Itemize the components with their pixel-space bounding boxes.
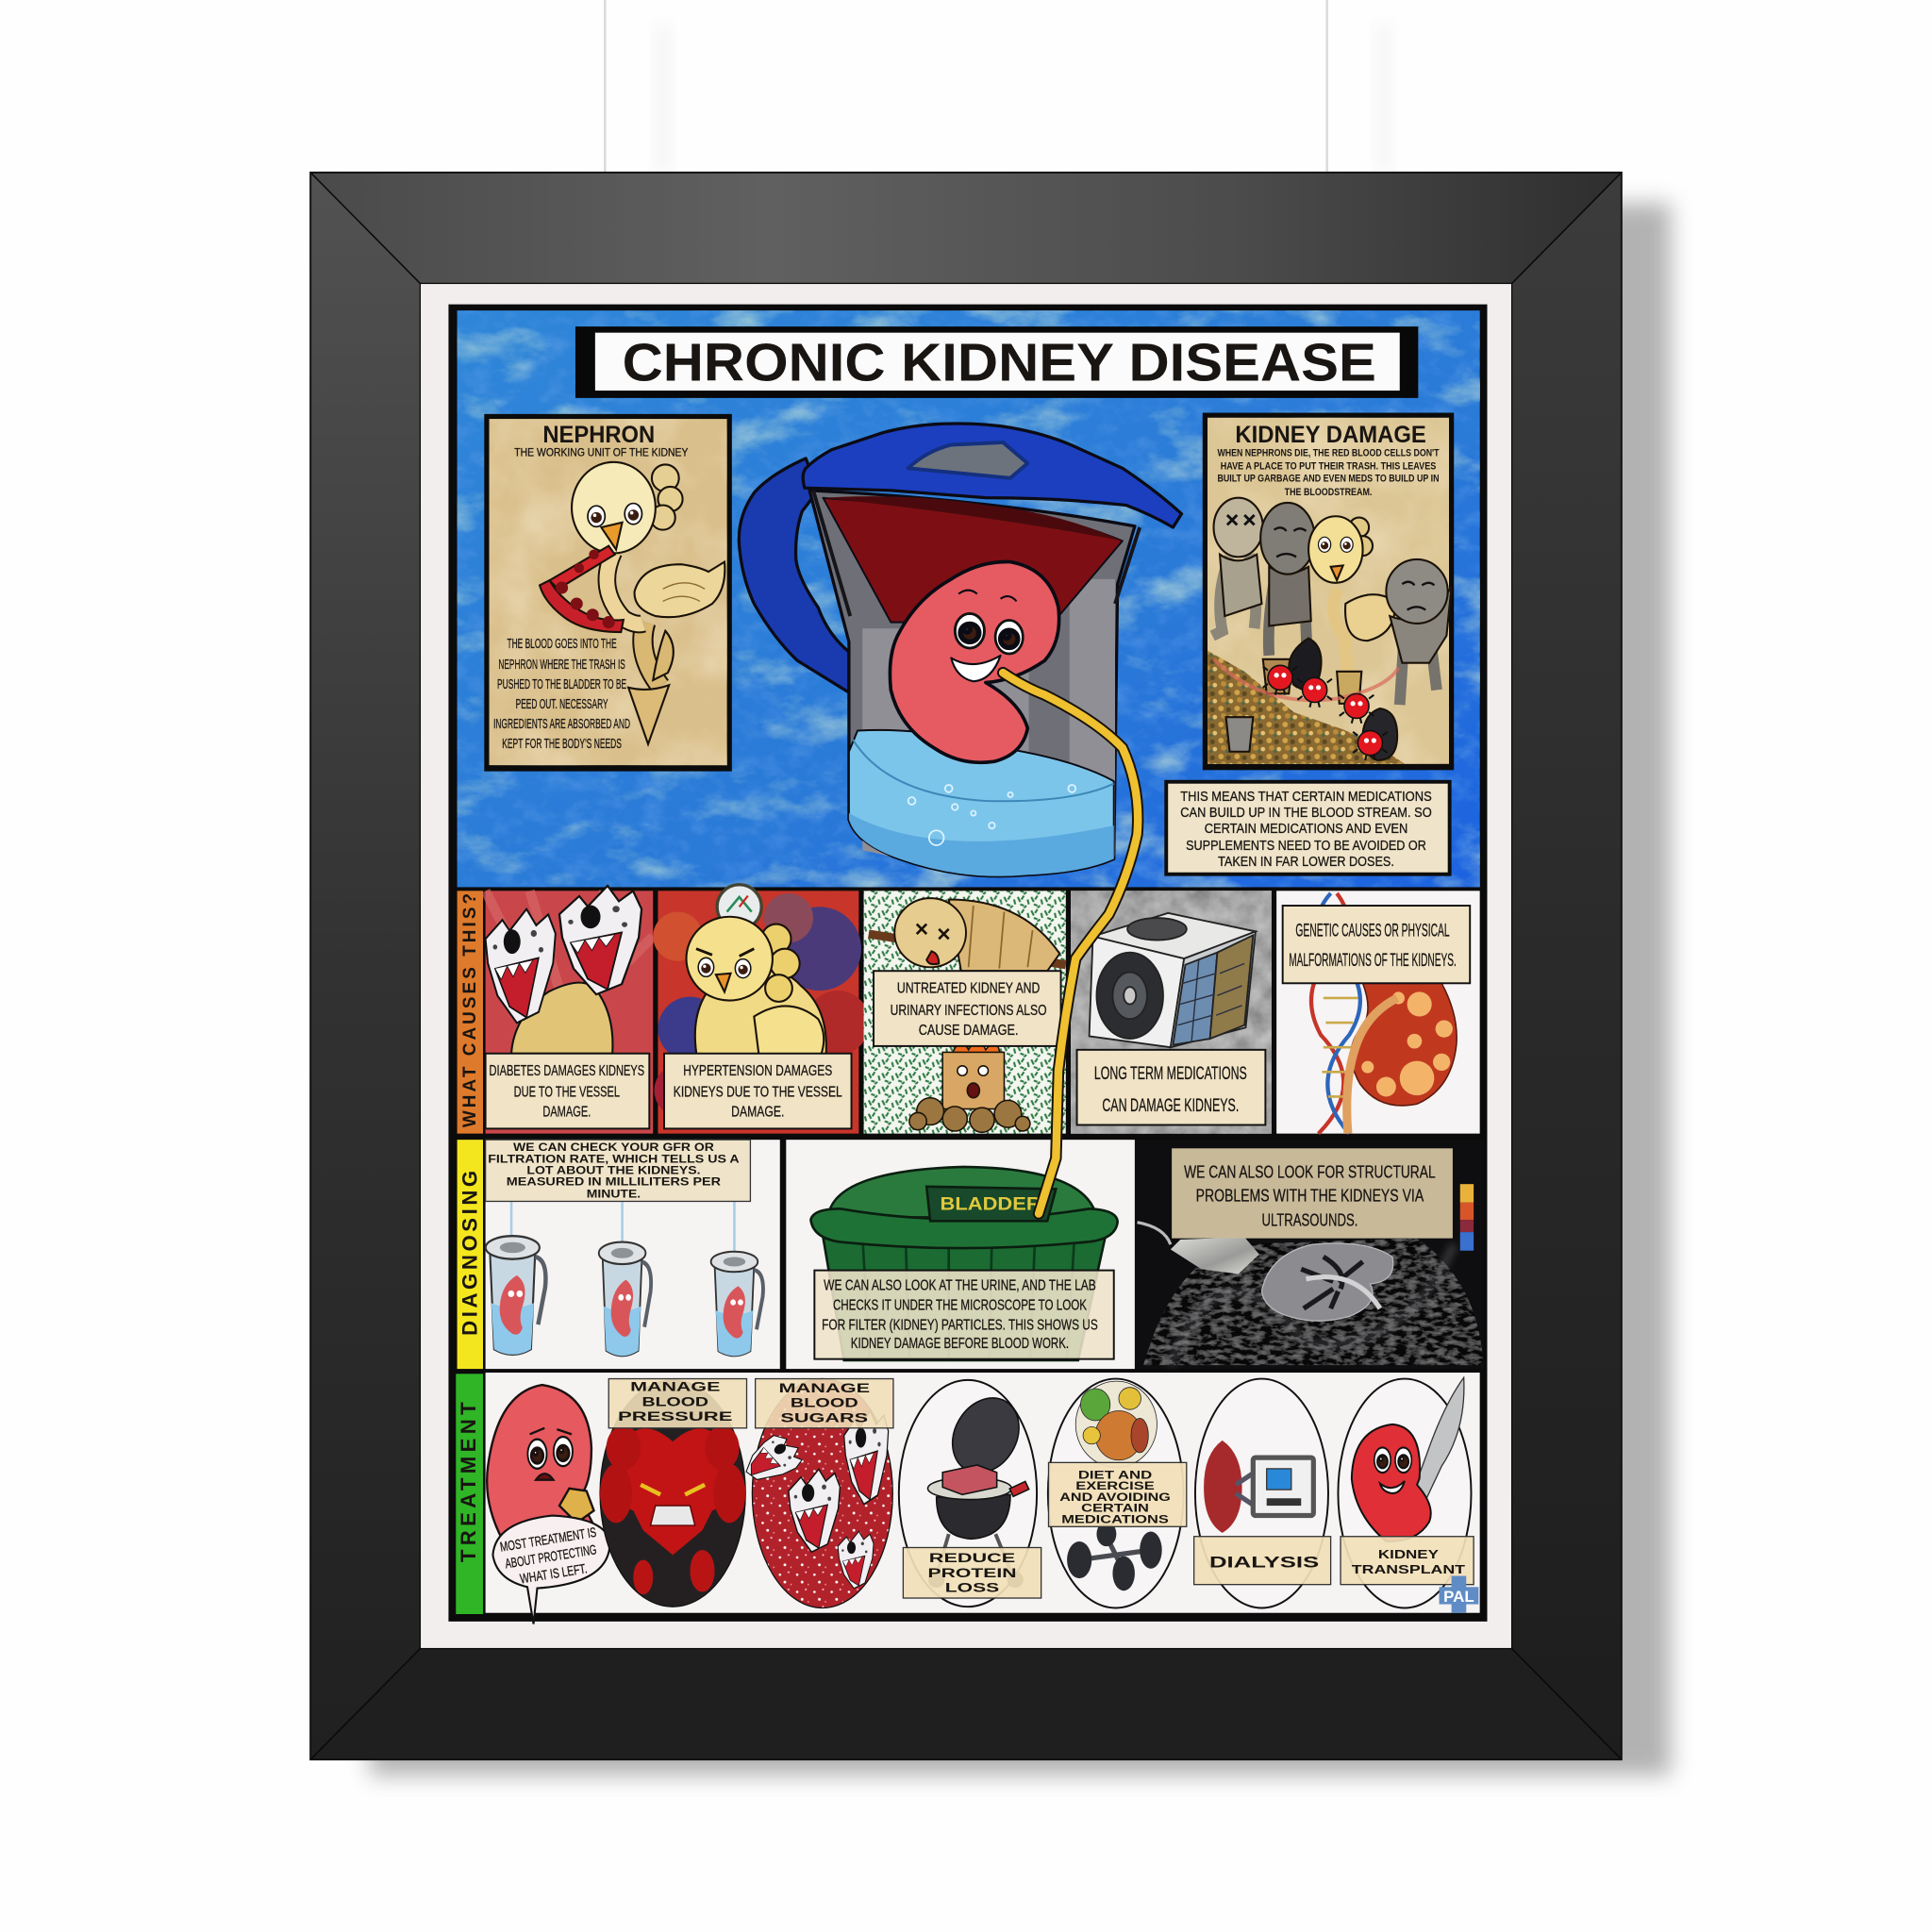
blood reservoir (823, 498, 1123, 623)
caption: gfr: MINUTE. (587, 1189, 641, 1201)
panel: blue header background (458, 310, 1480, 887)
nephron text block (493, 637, 630, 752)
label: diet and exercise: AND AVOIDING (1059, 1491, 1171, 1504)
caption: ultrasound: PROBLEMS WITH THE KIDNEYS VIA (1196, 1185, 1424, 1205)
speech bubble: ABOUT PROTECTING (504, 1542, 598, 1572)
caption: infections: CAUSE DAMAGE. (919, 1023, 1019, 1039)
panel: urine bladder bin (786, 1140, 1135, 1369)
callout: medications (1164, 780, 1452, 876)
caption: ultrasound: WE CAN ALSO LOOK FOR STRUCTURAL (1184, 1162, 1436, 1182)
caption: genetic causes: GENETIC CAUSES OR PHYSICAL (1295, 921, 1450, 941)
icon: ultrasound probe (1138, 1223, 1259, 1274)
speech bubble (492, 1516, 610, 1624)
label: diet and exercise: CERTAIN (1081, 1503, 1149, 1515)
icon: dna helix (1311, 893, 1360, 1134)
label: manage blood pressure: PRESSURE (618, 1409, 732, 1424)
label: diet and exercise (1049, 1462, 1187, 1526)
panel: genetic causes (1276, 891, 1480, 1134)
oval: kidney transplant (1338, 1377, 1472, 1607)
speech bubble: WHAT IS LEFT. (519, 1561, 589, 1587)
icon: nephron bird (540, 462, 724, 744)
label: manage blood sugars: BLOOD (791, 1396, 858, 1410)
icon: sad kidney (487, 1385, 594, 1541)
nephron text block: THE BLOOD GOES INTO THE (507, 637, 617, 652)
speech bubble: MOST TREATMENT IS (499, 1525, 597, 1556)
caption: gfr: MEASURED IN MILLILITERS PER (507, 1175, 722, 1188)
caption: hypertension: DAMAGE. (731, 1104, 784, 1120)
icon: yellow nephron attacked (511, 983, 612, 1054)
icon: smiling kidney (1352, 1424, 1431, 1541)
caption: urine: FOR FILTER (KIDNEY) PARTICLES. THIS SHOWS US (822, 1317, 1098, 1333)
caption: urine (814, 1271, 1114, 1359)
oval: muscular angry heart (600, 1380, 745, 1607)
icon: pressure gauge (717, 885, 761, 929)
damaged nephrons (1212, 498, 1452, 760)
nephron text block: NEPHRON WHERE THE TRASH IS (498, 658, 625, 673)
drip lines (511, 1201, 734, 1252)
label: manage blood pressure: MANAGE (630, 1380, 720, 1394)
title: CHRONIC KIDNEY DISEASE (623, 333, 1376, 392)
label: dialysis: DIALYSIS (1209, 1553, 1319, 1571)
kidney damage heading: KIDNEY DAMAGE (1235, 423, 1426, 448)
label: diet and exercise: EXERCISE (1075, 1480, 1155, 1492)
caption: ultrasound: ULTRASOUNDS. (1261, 1210, 1357, 1230)
icon: polycystic kidney (1347, 983, 1457, 1134)
caption: infections (874, 971, 1061, 1046)
panel: nephron (484, 414, 732, 772)
kidney damage text block: THE BLOODSTREAM. (1285, 487, 1372, 498)
icon: stressed chick (687, 917, 826, 1059)
caption: long term medications: CAN DAMAGE KIDNEYS. (1102, 1095, 1239, 1116)
poster mat (420, 283, 1512, 1649)
label: dialysis (1194, 1537, 1331, 1585)
caption: diabetes (486, 1054, 649, 1128)
section label: diagnosing (458, 1140, 483, 1369)
label: kidney transplant: KIDNEY (1378, 1547, 1439, 1561)
label: reduce protein loss: PROTEIN (928, 1566, 1017, 1580)
oval: grill (899, 1380, 1037, 1607)
nephron text block: KEPT FOR THE BODY'S NEEDS (502, 737, 622, 752)
caption: long term medications: LONG TERM MEDICATIONS (1094, 1063, 1247, 1084)
icon: tied up nephron (869, 898, 1066, 971)
label: manage blood sugars (756, 1379, 893, 1428)
label: diet and exercise: DIET AND (1078, 1469, 1152, 1481)
label: reduce protein loss: REDUCE (929, 1551, 1015, 1565)
caption: hypertension (664, 1054, 852, 1128)
caption: gfr (486, 1140, 750, 1201)
section label: what causes this: WHAT CAUSES THIS? (460, 893, 480, 1127)
callout: medications: SUPPLEMENTS NEED TO BE AVOIDED OR (1186, 839, 1426, 854)
callout: medications: TAKEN IN FAR LOWER DOSES. (1218, 855, 1394, 870)
nephron subheading: THE WORKING UNIT OF THE KIDNEY (514, 446, 689, 458)
nephron text block: PUSHED TO THE BLADDER TO BE (497, 677, 626, 692)
title (575, 326, 1418, 398)
kidney damage text block: HAVE A PLACE TO PUT THEIR TRASH. THIS LEAVES (1221, 461, 1436, 473)
panel: infections (864, 891, 1066, 1134)
caption: genetic causes: MALFORMATIONS OF THE KIDNEYS. (1289, 950, 1457, 971)
icon: scalpel (1409, 1377, 1464, 1506)
caption: infections: UNTREATED KIDNEY AND (897, 981, 1040, 997)
caption: diabetes: DAMAGE. (542, 1104, 591, 1120)
icon: dumbbells (1067, 1522, 1162, 1591)
icon: water pitcher with kidney (739, 424, 1182, 876)
garbage pile (1208, 651, 1405, 764)
section label: treatment: TREATMENT (457, 1402, 480, 1562)
filtered water (849, 730, 1114, 876)
logo: pal badge: PAL (1443, 1588, 1474, 1606)
poster outer border (448, 305, 1487, 1622)
caption: gfr: FILTRATION RATE, WHICH TELLS US A (488, 1153, 740, 1165)
icon: green trash bin labelled bladder (810, 1167, 1118, 1360)
hanging strings (605, 0, 1393, 173)
section label: treatment (456, 1374, 483, 1614)
icon: graham cracker on fire (909, 1035, 1030, 1132)
icon: air conditioning unit (1090, 913, 1256, 1047)
panel: kidney damage (1203, 413, 1454, 770)
frame shadow (370, 204, 1671, 1775)
callout: medications: THIS MEANS THAT CERTAIN MEDICATIONS (1180, 790, 1432, 805)
callout: medications: CAN BUILD UP IN THE BLOOD STREAM. SO (1180, 806, 1432, 821)
label: manage blood pressure (608, 1379, 747, 1428)
label: reduce protein loss (903, 1547, 1041, 1598)
nephron text block: PEED OUT. NECESSARY (516, 697, 608, 712)
ultrasound scan (1143, 1239, 1484, 1365)
kidney damage text block (1217, 447, 1440, 498)
label: reduce protein loss: LOSS (945, 1581, 999, 1595)
icon: food plate (1075, 1381, 1157, 1468)
caption: ultrasound (1172, 1148, 1453, 1239)
panel: gfr (486, 1140, 780, 1369)
nephron text block: INGREDIENTS ARE ABSORBED AND (493, 717, 630, 732)
arrow: yellow urine tube from kidney to bladder (1003, 673, 1138, 1214)
pitcher handle (739, 458, 849, 692)
caption: diabetes: DIABETES DAMAGES KIDNEYS (490, 1063, 644, 1079)
kidney damage text block: WHEN NEPHRONS DIE, THE RED BLOOD CELLS DON'T (1217, 447, 1440, 458)
panel: diagnosing (458, 1140, 1484, 1369)
oval: red blood sugars (738, 1379, 892, 1607)
panel: diabetes (486, 886, 653, 1134)
happy kidney (890, 562, 1059, 762)
callout: medications: CERTAIN MEDICATIONS AND EVEN (1205, 822, 1407, 837)
colour scale (1460, 1184, 1474, 1251)
caption: urine: WE CAN ALSO LOOK AT THE URINE, AND THE LAB (824, 1278, 1096, 1294)
caption: hypertension: HYPERTENSION DAMAGES (683, 1063, 832, 1079)
oval: dialysis (1195, 1379, 1328, 1607)
oval: food and dumbbells (1048, 1379, 1184, 1607)
icon: mini pitchers (486, 1236, 763, 1356)
section label: diagnosing: DIAGNOSING (458, 1171, 481, 1336)
panel: treatment (456, 1373, 1480, 1624)
red blood cells (1263, 665, 1388, 760)
caption: genetic causes (1283, 906, 1470, 983)
icon: sharks (486, 886, 641, 1023)
panel: ultrasound (1135, 1140, 1484, 1369)
panel: what causes this (458, 885, 1480, 1134)
pitcher body (809, 491, 1135, 876)
kidney damage text block: BUILT UP GARBAGE AND EVEN MEDS TO BUILD UP IN (1217, 474, 1440, 485)
panel: long term medications (1071, 891, 1272, 1134)
logo: pal badge (1440, 1576, 1478, 1613)
pitcher lid (803, 424, 1182, 527)
caption: urine: KIDNEY DAMAGE BEFORE BLOOD WORK. (851, 1336, 1069, 1352)
nephron heading: NEPHRON (542, 423, 655, 448)
caption: diabetes: DUE TO THE VESSEL (514, 1084, 620, 1100)
panel: hypertension (653, 885, 870, 1134)
label: manage blood pressure: BLOOD (641, 1394, 708, 1408)
caption: long term medications (1077, 1050, 1265, 1124)
label: manage blood sugars: MANAGE (778, 1381, 870, 1395)
panel: urine bladder bin: BLADDER (941, 1194, 1041, 1215)
black picture frame (310, 173, 1622, 1759)
label: manage blood sugars: SUGARS (780, 1410, 868, 1424)
caption: infections: URINARY INFECTIONS ALSO (891, 1003, 1047, 1019)
caption: gfr: LOT ABOUT THE KIDNEYS. (526, 1165, 701, 1177)
caption: gfr: WE CAN CHECK YOUR GFR OR (513, 1141, 715, 1154)
label: kidney transplant: TRANSPLANT (1352, 1562, 1465, 1576)
label: kidney transplant (1341, 1537, 1474, 1585)
caption: hypertension: KIDNEYS DUE TO THE VESSEL (674, 1084, 842, 1100)
caption: urine: CHECKS IT UNDER THE MICROSCOPE TO LOOK (833, 1297, 1087, 1313)
label: diet and exercise: MEDICATIONS (1061, 1513, 1169, 1525)
